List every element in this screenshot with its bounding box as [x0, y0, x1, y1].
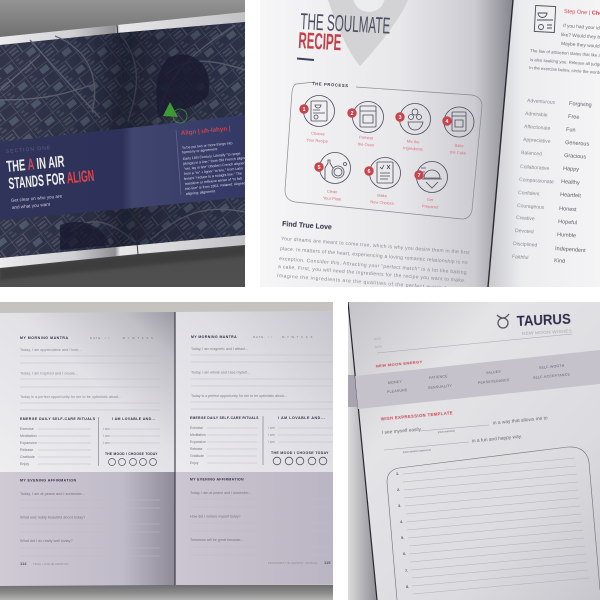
qualities column one: Affectionate [524, 124, 551, 132]
heading: section one [6, 125, 248, 210]
spine [488, 0, 513, 287]
left page [260, 0, 513, 287]
step 7: Get [427, 197, 434, 202]
wish list box [387, 447, 600, 600]
energy keywords [387, 364, 571, 394]
find true love body: a cake. First, you will need the ingredients for the recipe you want to make. [278, 264, 466, 284]
qualities column one: Admirable [525, 111, 548, 119]
step 4: Bake [454, 143, 465, 148]
wish numbers: 8. [406, 585, 409, 589]
wish numbers: 2. [397, 488, 400, 492]
qualities column two: Forgiving [569, 101, 592, 109]
process label: THE PROCESS [312, 81, 349, 88]
mood heading right: THE MOOD I CHOOSE TODAY [271, 451, 329, 455]
rituals list: Enjoy [20, 462, 29, 466]
evening prompts right: Today, I am at peace and I surrender... [190, 491, 251, 495]
left page journal text [20, 336, 158, 566]
qualities column two: Gracious [564, 153, 586, 161]
rituals heading: EMERGE DAILY SELF-CARE RITUALS [20, 417, 96, 421]
panel: taurus new moon wishes [348, 302, 600, 600]
energy keywords: SELF-ACCEPTANCE [533, 372, 571, 380]
qualities column two [554, 101, 592, 265]
step 2: Preheat [359, 135, 374, 141]
morning prompts right [191, 347, 287, 398]
qualities column one: Adventurous [527, 98, 556, 106]
qualities column one [512, 98, 556, 261]
i am prompts right: I am [268, 433, 275, 437]
step 7 [414, 162, 448, 210]
find true love heading: Find True Love [282, 221, 332, 231]
date and weekday row: DATE: / / M T W T F S S [90, 336, 154, 340]
morning heading right: MY MORNING MANTRA [191, 335, 237, 339]
rituals list right: Enjoy [190, 461, 199, 465]
mood heading: THE MOOD I CHOOSE TODAY [105, 452, 158, 456]
taurus title: TAURUS [516, 311, 571, 330]
step one body [529, 23, 600, 75]
morning prompts: Today, I am inspired and I create... [20, 372, 78, 376]
book shadow [0, 245, 245, 280]
rituals list: Expansion [20, 441, 37, 445]
wish numbers: 4. [400, 520, 403, 524]
step 1: Your Recipe [306, 137, 329, 144]
right page [488, 0, 600, 287]
i am prompts right [268, 426, 275, 444]
heading: section one: SECTION ONE [6, 145, 51, 155]
rituals list: Exercise [20, 427, 34, 431]
right page journal text [190, 335, 331, 565]
step 5 [314, 152, 350, 202]
definition body: lineare "reduce to a straight line." The [184, 171, 242, 181]
panel: daily journal spread [0, 302, 333, 600]
main page [348, 302, 600, 600]
find true love body [278, 236, 470, 287]
qualities column one: Appreciative [523, 137, 551, 145]
step 2 [347, 102, 384, 148]
find true love body: exception. Consider this. Attracting your "perfect match" is a lot like baking [279, 256, 467, 276]
date labels [374, 336, 382, 349]
backdrop [0, 302, 333, 600]
i am prompts: I am [103, 427, 110, 431]
definition body: To be put two or more things into [182, 141, 233, 150]
step one body: In the exercise below, circle the words [529, 65, 600, 75]
wish template sentence: in a fun and happy way. [472, 434, 522, 444]
qualities column one: Disciplined [513, 241, 538, 249]
wish lines [403, 458, 589, 594]
qualities column one: Confident [518, 190, 540, 198]
step 4 [442, 107, 474, 156]
definition body: aligning; alignment. [186, 189, 216, 196]
left page top [0, 312, 175, 472]
step 3: Ingredients [403, 145, 423, 152]
evening heading: MY EVENING AFFIRMATION [20, 478, 77, 482]
backdrop [0, 0, 245, 287]
definition body: harmony or agreement. [182, 147, 218, 154]
step 1: Choose [311, 131, 326, 137]
qualities column two: Generous [565, 140, 590, 148]
i am prompts [103, 427, 110, 445]
qualities column one: Faithful [512, 254, 529, 261]
bottom shadow [0, 585, 333, 600]
lovable heading right: I AM LOVABLE AND... [278, 416, 325, 420]
title dash [297, 58, 314, 60]
step 4: 4 [445, 119, 449, 125]
date labels: DATE [374, 336, 381, 341]
energy keywords: SENSUALITY [428, 384, 453, 390]
blank hints: [insert intention] [438, 430, 455, 434]
title line one: THE A IN AIR [6, 153, 65, 176]
qualities column one: Courageous [517, 203, 545, 211]
mood faces [108, 458, 156, 466]
footer right: PROSPERITY BLUEPRINT JOURNAL [268, 562, 318, 565]
morning prompts right: Today is a perfect opportunity for me to be optimistic about... [191, 394, 287, 398]
morning heading: MY MORNING MANTRA [20, 336, 69, 340]
rituals list right: Release [190, 447, 203, 451]
evening prompts right: How did I nurture myself today? [190, 514, 241, 518]
header rule [377, 334, 572, 353]
subtitle second line: and what you want [12, 202, 51, 210]
energy keywords: PERSEVERANCE [478, 378, 510, 385]
previous page sliver [348, 302, 377, 600]
qualities column two: Kind [554, 258, 565, 265]
footer left: TRUE LOVE BLUEPRINT [33, 562, 69, 566]
page number left: 114 [20, 561, 27, 566]
step 4: the Cake [450, 149, 467, 156]
qualities column two: Fun [566, 127, 576, 134]
step 1: 1 [302, 107, 306, 113]
right page top [175, 311, 333, 472]
definition heading: Align | uh-lahyn | [181, 125, 231, 137]
subtitle: Get clear on who you are [11, 194, 63, 203]
rituals list right: Expansion [190, 440, 206, 444]
step 5: Your Plate [323, 195, 342, 202]
qualities column one: Compassionate [519, 177, 554, 185]
i am prompts: I am [103, 434, 110, 438]
wish numbers: 6. [403, 552, 406, 556]
date row right: DATE: / / M T W T F S S [253, 335, 313, 339]
qualities column two: Heartfelt [560, 192, 581, 199]
moon energy band [355, 350, 600, 409]
step 5: 5 [317, 165, 321, 171]
step 1 [299, 96, 334, 144]
wish numbers: 5. [401, 536, 404, 540]
evening prompts: What did I do really well today? [20, 539, 73, 543]
qualities column one: Collaborative [520, 164, 550, 172]
recipe icon [534, 5, 556, 33]
mood faces right [273, 457, 327, 465]
right page bottom [175, 472, 333, 585]
taurus glyph [497, 314, 509, 328]
sliver band [348, 375, 358, 407]
rituals list right: Exercise [190, 426, 203, 430]
step 3: 3 [398, 115, 402, 121]
definition body: (things) in a line," from Old French aligner [183, 156, 248, 166]
purple band [0, 115, 245, 220]
energy heading: NEW MOON ENERGY [376, 359, 423, 368]
wish template sentence: I see myself easily [382, 427, 422, 436]
qualities column two: Humble [557, 232, 576, 239]
evening prompts right [190, 491, 251, 542]
evening prompts right: Tomorrow will be great because... [190, 538, 244, 542]
energy keywords: MONEY [388, 380, 403, 385]
panel: soulmate recipe spread [260, 0, 600, 293]
evening heading right: MY EVENING AFFIRMATION [190, 478, 244, 482]
qualities column two: Free [568, 114, 580, 121]
title: THE SOULMATE [300, 8, 391, 39]
wish template sentence: in a way that allows me to [493, 415, 548, 426]
qualities column two: Honest [559, 206, 577, 213]
qualities column one: Creative [516, 215, 535, 222]
morning prompts: Today is a perfect opportunity for me to be optimistic about... [20, 395, 122, 399]
divider rule [176, 130, 181, 195]
definition body [182, 141, 248, 196]
morning prompts right: Today, I am whole and I see myself... [191, 370, 250, 374]
rituals heading right: EMERGE DAILY SELF-CARE RITUALS [190, 416, 259, 420]
i am prompts: I am [103, 441, 110, 445]
morning prompts: Today, I am appreciative and I love... [20, 348, 82, 352]
find true love body: Your dreams are meant to come true, which is why you desire them in the first [281, 236, 470, 256]
wish template sentence [382, 415, 548, 444]
definition body: transitive or reflexive sense of "to fall [185, 177, 242, 186]
date labels: SIGN [375, 344, 382, 349]
evening prompts: Today, I am at peace and I surrender... [20, 492, 85, 496]
new moon wishes subtitle: NEW MOON WISHES [522, 328, 572, 337]
energy keywords: VALUES [486, 370, 501, 375]
template blanks [384, 425, 489, 450]
wish numbers [396, 472, 409, 589]
rituals list: Gratitude [20, 455, 35, 459]
morning prompts right: Today, I am magnetic and I attract... [191, 347, 248, 351]
step 7: 7 [417, 173, 421, 179]
panel: section opener spread [0, 0, 248, 287]
lovable heading: I AM LOVABLE AND... [112, 417, 156, 421]
spine [117, 25, 138, 254]
spine [348, 302, 377, 600]
definition body: "set, lay in line" (Modern French aligner) [184, 161, 246, 171]
page number right: 115 [324, 560, 331, 565]
spine [174, 312, 176, 585]
process box [285, 82, 482, 219]
step 3 [395, 104, 430, 152]
definition body: into line" is from 1853. Related: Aligned; [185, 181, 247, 191]
qualities column one: Balanced [521, 150, 542, 157]
i am prompts right: I am [268, 440, 275, 444]
energy keywords: PLEASURE [387, 388, 408, 394]
rituals list right: Meditation [190, 433, 206, 437]
rituals list right [190, 426, 206, 465]
rituals list: Meditation [20, 434, 37, 438]
step 6: Make [377, 193, 388, 198]
i am prompts right: I am [268, 426, 275, 430]
title [298, 13, 390, 50]
step 6: 6 [367, 169, 371, 175]
morning prompts [20, 348, 122, 399]
qualities column two: Independent [555, 246, 586, 254]
title accent word: RECIPE [298, 27, 342, 55]
step 2: the Oven [358, 141, 374, 148]
rituals list: Release [20, 448, 33, 452]
qualities column two: Hopeful [558, 219, 577, 226]
evening prompts: What was really beautiful about today? [20, 516, 85, 520]
energy keywords: PATIENCE [429, 374, 448, 380]
page edges [0, 12, 245, 268]
qualities column two: Healthy [561, 179, 580, 186]
qualities column one: Devoted [515, 228, 534, 235]
process steps [299, 96, 474, 210]
dividers [98, 416, 263, 466]
title line two: STANDS FOR ALIGN [8, 168, 95, 193]
step 5: Clean [327, 189, 337, 194]
definition body: Early 15th Century, Literally "to range [183, 151, 241, 161]
green star marker [163, 102, 187, 123]
wish template heading: WISH EXPRESSION TEMPLATE [381, 410, 453, 421]
step 3: Mix the [406, 139, 420, 145]
ruled lines [20, 355, 333, 556]
wish numbers: 3. [398, 504, 401, 508]
rituals list [20, 427, 37, 466]
step 6: New Choices [370, 199, 394, 206]
left page bottom [0, 472, 175, 586]
wish numbers: 7. [405, 569, 408, 573]
step 2: 2 [350, 111, 354, 117]
step 6 [364, 158, 400, 206]
evening prompts [20, 492, 85, 543]
rituals list right: Gratitude [190, 454, 204, 458]
wish numbers: 1. [396, 472, 399, 476]
blank hints [403, 430, 455, 454]
blank hints: [insert desired experience] [403, 449, 431, 454]
step 7: Prepared [422, 203, 438, 210]
find true love body: place. In matters of the heart, experiencing a loving romantic relationship is no [280, 246, 468, 266]
map pin shape [328, 0, 408, 66]
city map pages [0, 22, 245, 258]
energy keywords: SELF-WORTH [539, 364, 565, 370]
find true love body: Imagine the ingredients are the qualities of the perfect match for you. [277, 273, 465, 293]
qualities column two: Happy [563, 166, 579, 173]
definition body: from a "to" + ligner "to line," from Latin [184, 166, 243, 176]
